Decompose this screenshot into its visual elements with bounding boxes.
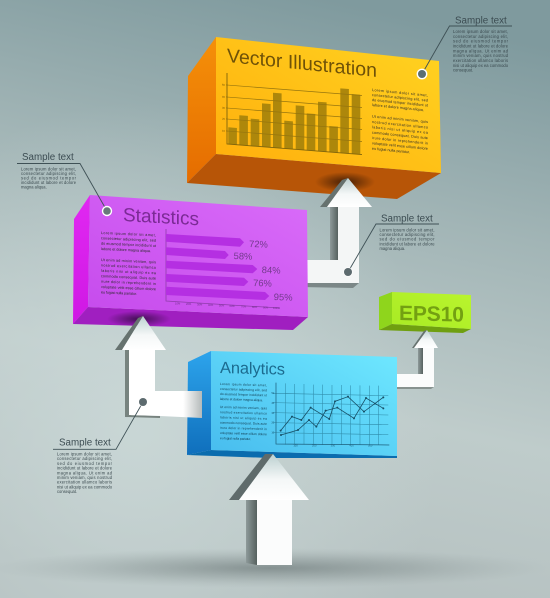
purple left side [73, 195, 90, 324]
callout: top right: minim veniam, quis nostrud [453, 53, 509, 58]
callout: top left: incididunt ut labore et dolore [21, 180, 77, 185]
blue bottom side [187, 450, 397, 458]
line chart: blue: 300 [331, 444, 336, 448]
purple body text: laboris nisi ut aliquip ex ea [101, 269, 157, 275]
line chart: blue: 50 [271, 391, 275, 395]
callout: bottom left: sed do eiusmod tempor [57, 461, 113, 466]
callout: top right [417, 16, 512, 79]
purple heading: Statistics [123, 205, 199, 230]
callout: top left [17, 152, 112, 216]
callout: top left: magna aliqua. [21, 185, 47, 190]
blue heading: Analytics [220, 359, 285, 379]
line chart: blue: 30 [271, 411, 275, 415]
orange body text: consectetur adipiscing elit, sed [372, 93, 428, 103]
callout: top right: incididunt ut labore et dolore [453, 44, 509, 48]
orange body text: Lorem ipsum dolor sit amet, [372, 88, 428, 98]
horizontal bar chart: purple: 10% [175, 302, 181, 306]
blue front face [211, 351, 397, 456]
bar chart: orange [222, 73, 362, 155]
orange front face [216, 37, 441, 173]
blue body text: commodo consequat. Duis aute [220, 421, 267, 426]
panel: blue analytics box [187, 351, 397, 458]
line chart: blue [271, 383, 389, 448]
horizontal bar chart: purple: 58% [233, 250, 253, 262]
callout: middle right: Lorem ipsum dolor sit amet, [380, 228, 434, 232]
purple body text: Lorem ipsum dolor sit amet, [101, 231, 156, 237]
callout: top left: Lorem ipsum dolor sit amet, [21, 166, 76, 172]
green front face [392, 292, 471, 329]
orange body text: laboris nisi ut aliquip ex ea [372, 125, 429, 135]
purple body text: irure dolor in reprehenderit in [101, 280, 156, 286]
blue body text [220, 382, 267, 442]
callout: middle right [343, 214, 439, 277]
arrow: bottom main arrow [229, 454, 309, 565]
orange body text: labore et dolore magna aliqua. [372, 103, 424, 112]
orange body text: do eiusmod tempor incididunt ut [372, 98, 428, 108]
callout: bottom left: consequat. [57, 489, 77, 494]
callout: bottom left: exercitation ullamco laboris [57, 480, 112, 485]
callout: top right: consequat. [453, 68, 473, 73]
purple body text: nostrud exercitation ullamco [101, 263, 156, 270]
horizontal bar chart: purple [166, 229, 293, 310]
orange bottom side [187, 154, 441, 199]
horizontal bar chart: purple: 50% [219, 304, 225, 308]
horizontal bar chart: purple: 80% [252, 305, 258, 309]
orange body text: nostrud exercitation ullamco [372, 120, 428, 130]
horizontal bar chart: purple: 70% [241, 304, 247, 308]
callout: top left: Sample text [22, 152, 74, 163]
panel: orange vector illustration box [187, 37, 441, 199]
line chart: blue: 500 [368, 444, 373, 448]
arrow head: blue to green connector [412, 330, 438, 348]
orange heading: Vector Illustration [227, 45, 377, 82]
horizontal bar chart: purple: 90% [263, 306, 269, 310]
bar chart: orange: 20 [222, 117, 225, 121]
line chart: blue: 10 [271, 431, 275, 435]
line chart: blue: 40 [271, 401, 275, 405]
bar chart: orange: 50 [222, 83, 225, 87]
horizontal bar chart: purple: 95% [274, 291, 293, 303]
blue body text: irure dolor in reprehenderit in [220, 426, 267, 431]
callout: top right: Sample text [455, 16, 507, 26]
blue body text: labore et dolore magna aliqua. [220, 397, 263, 402]
line chart: blue: 100 [293, 444, 298, 448]
orange body text [372, 88, 429, 156]
horizontal bar chart: purple: 72% [249, 238, 268, 250]
callout: bottom left: Lorem ipsum dolor sit amet, [57, 452, 112, 456]
callout: top right: magna aliqua. Ut enim ad [453, 48, 509, 53]
callout: bottom left: nisi ut aliquip ex ea commodo [57, 484, 113, 489]
line chart: blue: 400 [349, 444, 354, 448]
horizontal bar chart: purple: 100% [273, 306, 280, 310]
callout: middle right: magna aliqua. [380, 246, 405, 251]
purple body text: do eiusmod tempor incididunt ut [101, 242, 156, 248]
callout: top right: Lorem ipsum dolor sit amet, [453, 29, 508, 34]
purple body text: eu fugiat nulla pariatur. [101, 290, 137, 296]
callout: bottom left [53, 397, 148, 494]
arrow: purple to orange connector [300, 178, 372, 288]
purple front face [88, 195, 308, 317]
panel: purple statistics box [73, 195, 308, 330]
panel: green EPS10 box [379, 292, 471, 333]
green bottom side [379, 324, 471, 333]
green left side [379, 292, 392, 330]
purple body text: voluptate velit esse cillum dolore [101, 285, 156, 291]
purple body text: Ut enim ad minim veniam, quis [101, 258, 156, 264]
callout: top right: exercitation ullamco laboris [453, 58, 508, 63]
shadow under purple box [110, 312, 168, 326]
blue body text: eu fugiat nulla pariatur. [220, 436, 251, 441]
orange body text: irure dolor in reprehenderit in [372, 136, 428, 146]
line chart: blue: 200 [312, 444, 317, 448]
callout: top right: consectetur adipiscing elit, [453, 34, 508, 39]
callout: middle right: incididunt ut labore et dolore [380, 241, 435, 246]
blue body text: do eiusmod tempor incididunt ut [220, 392, 267, 397]
blue body text: laboris nisi ut aliquip ex ea [220, 415, 267, 421]
blue body text: Lorem ipsum dolor sit amet, [220, 382, 267, 387]
callout: middle right: sed do eiusmod tempor [380, 237, 435, 242]
purple body text: consectetur adipiscing elit, sed [101, 236, 156, 243]
callout: middle right: consectetur adipiscing elit, [380, 232, 434, 237]
orange body text: voluptate velit esse cillum dolore [372, 141, 428, 151]
horizontal bar chart: purple: 76% [253, 277, 272, 289]
purple body text [101, 231, 157, 297]
orange body text: commodo consequat. Duis aute [372, 131, 428, 140]
horizontal bar chart: purple: 84% [262, 264, 281, 276]
blue body text: Ut enim ad minim veniam, quis [220, 405, 267, 410]
blue body text: nostrud exercitation ullamco [220, 410, 267, 416]
callout: top left: consectetur adipiscing elit, [21, 171, 76, 176]
callout: bottom left: consectetur adipiscing elit, [57, 456, 112, 461]
callout: bottom left: incididunt ut labore et dolore [57, 466, 113, 471]
arrow: blue to green connector [397, 346, 434, 389]
horizontal bar chart: purple: 40% [208, 303, 214, 307]
blue body text: voluptate velit esse cillum dolore [220, 431, 267, 436]
callout: bottom left: minim veniam, quis nostrud [57, 475, 113, 480]
callout: bottom left: magna aliqua. Ut enim ad [57, 470, 113, 475]
callout: top left: sed do eiusmod tempor [21, 176, 77, 180]
horizontal bar chart: purple: 20% [186, 302, 192, 306]
purple bottom side [73, 307, 308, 330]
blue left side [187, 351, 211, 455]
bar chart: orange: 40 [222, 95, 225, 99]
purple body text: commodo consequat. Duis aute [101, 274, 156, 281]
orange body text: Ut enim ad minim veniam, quis [372, 115, 428, 124]
EPS10 label: EPS10 [399, 302, 464, 327]
callout: bottom left: Sample text [59, 438, 111, 448]
orange body text: eu fugiat nulla pariatur. [372, 147, 410, 154]
orange left side [187, 37, 216, 183]
horizontal bar chart: purple: 60% [230, 304, 235, 308]
bar chart: orange: 10 [222, 129, 225, 133]
bar chart: orange: 30 [222, 106, 225, 110]
callout: middle right: Sample text [381, 214, 433, 224]
callout: top right: nisi ut aliquip ex ea commodo [453, 63, 509, 68]
purple body text: labore et dolore magna aliqua. [101, 247, 151, 253]
callout: top right: sed do eiusmod tempor [453, 39, 509, 44]
line chart: blue: 20 [271, 421, 275, 425]
blue body text: consectetur adipiscing elit, sed [220, 387, 267, 392]
horizontal bar chart: purple: 30% [197, 302, 203, 306]
arrow: blue to purple connector [115, 316, 202, 418]
shadow under orange box [317, 172, 373, 190]
